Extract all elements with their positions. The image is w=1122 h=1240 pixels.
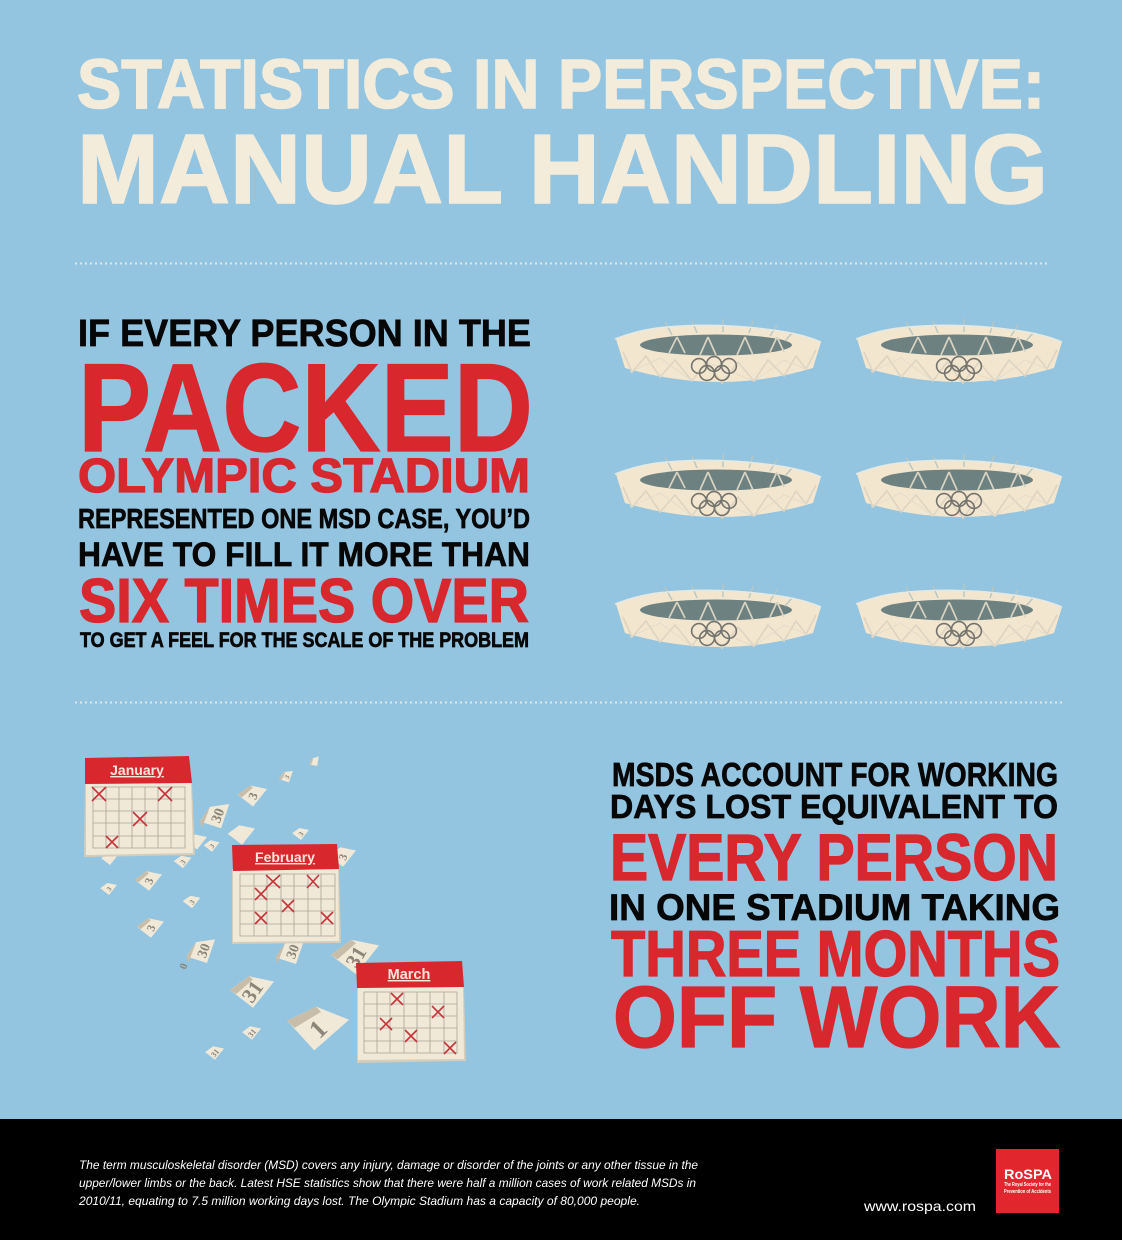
text block: working days lost: DAYS LOST EQUIVALENT TO <box>610 788 1058 825</box>
illustration: falling calendar pages: 3 <box>178 858 188 866</box>
text block: working days lost: EVERY PERSON <box>610 820 1058 894</box>
text block: stadium comparison: TO GET A FEEL FOR THE SCALE OF THE PROBLEM <box>80 629 529 652</box>
illustration: falling calendar pages: 3 <box>209 842 217 850</box>
icon: January calendar <box>84 756 195 857</box>
icon: January calendar: January <box>110 762 164 778</box>
title <box>77 45 1048 224</box>
text block: stadium comparison: IF EVERY PERSON IN THE <box>78 313 531 355</box>
illustration: falling calendar pages: 3 <box>246 791 261 801</box>
icon: stadium 2 <box>856 319 1062 383</box>
logo: RoSPA: Prevention of Accidents <box>1004 1189 1051 1195</box>
icon: March calendar <box>356 961 466 1063</box>
title: STATISTICS IN PERSPECTIVE: <box>77 45 1045 123</box>
illustration: falling calendar pages: 31 <box>237 976 268 1007</box>
illustration: falling calendar pages: 3 <box>297 830 306 838</box>
illustration: falling calendar pages: 31 <box>246 1027 258 1039</box>
text block: footnote: upper/lower limbs or the back. Latest HSE statistics show that there were half a million cases of work related MSDs in <box>79 1176 696 1190</box>
logo: RoSPA: The Royal Society for the <box>1004 1182 1051 1188</box>
illustration: falling calendar pages: 3 <box>144 923 159 933</box>
title: MANUAL HANDLING <box>77 114 1048 224</box>
icon: March calendar: March <box>388 967 430 983</box>
icon: stadium 5 <box>615 584 821 648</box>
illustration: falling calendar pages: 30 <box>194 941 214 960</box>
illustration: falling calendar pages: 1 <box>303 1014 333 1044</box>
icon: February calendar <box>232 844 341 944</box>
illustration: falling calendar pages <box>100 755 379 1060</box>
illustration: falling calendar pages: 3 <box>142 876 157 886</box>
icon: stadium 6 <box>856 584 1062 648</box>
illustration: six Olympic stadiums <box>615 319 1062 648</box>
illustration: falling calendar pages: 3 <box>284 774 292 781</box>
illustration: falling calendar pages: 31 <box>209 1047 221 1059</box>
logo: RoSPA <box>996 1149 1059 1213</box>
illustration: falling calendar pages: 31 <box>342 943 371 972</box>
text block: working days lost: OFF WORK <box>613 969 1060 1066</box>
label: fallen zero: 0 <box>177 961 191 971</box>
illustration: falling calendar pages: 30 <box>208 806 228 825</box>
text block: footnote <box>78 1158 698 1208</box>
icon: stadium 1 <box>615 319 821 383</box>
text block: stadium comparison: REPRESENTED ONE MSD CASE, YOU’D <box>78 503 530 534</box>
text block: stadium comparison: OLYMPIC STADIUM <box>78 450 530 503</box>
text block: working days lost: THREE MONTHS <box>611 917 1060 990</box>
panel: footer <box>0 1119 1122 1240</box>
text block: stadium comparison: PACKED <box>78 339 533 478</box>
icon: February calendar: February <box>255 849 315 865</box>
text block: working days lost: MSDS ACCOUNT FOR WORKING <box>612 756 1058 793</box>
text block: stadium comparison: SIX TIMES OVER <box>79 567 529 636</box>
text block: stadium comparison <box>78 313 533 652</box>
text block: footnote: 2010/11, equating to 7.5 million working days lost. The Olympic Stadium has a capacity of 80,000 people. <box>78 1194 640 1208</box>
icon: stadium 4 <box>856 454 1062 518</box>
illustration: falling calendar pages: 3 <box>336 852 351 862</box>
text block: working days lost <box>609 756 1060 1066</box>
illustration: falling calendar pages: 30 <box>283 942 303 961</box>
text block: working days lost: IN ONE STADIUM TAKING <box>609 887 1060 928</box>
illustration: falling calendar pages: 3 <box>105 885 114 893</box>
illustration: falling calendar pages: 3 <box>187 898 197 906</box>
website url: www.rospa.com <box>863 1198 976 1214</box>
text block: footnote: The term musculoskeletal disorder (MSD) covers any injury, damage or disorder of the joints or any other tissue in the <box>79 1158 698 1172</box>
icon: stadium 3 <box>615 454 821 518</box>
text block: stadium comparison: HAVE TO FILL IT MORE THAN <box>78 536 530 574</box>
logo: RoSPA: RoSPA <box>1004 1166 1052 1182</box>
